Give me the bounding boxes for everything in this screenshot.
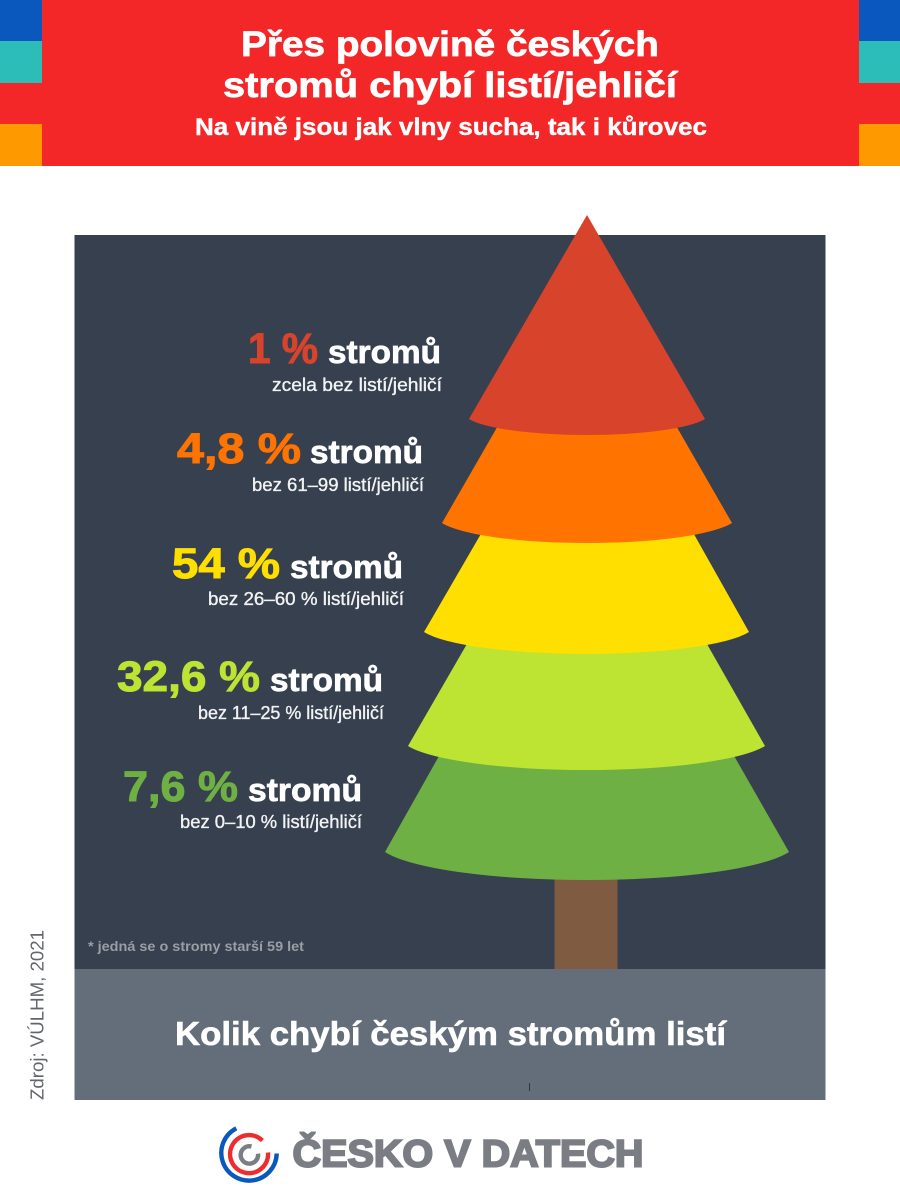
- label: 32,6 %: [117, 653, 384, 723]
- icon: concentric rings: [221, 1128, 277, 1181]
- tree illustration: [385, 215, 789, 969]
- logo: Česko v datech: [221, 1128, 643, 1181]
- label: 4,8 %: [177, 425, 424, 495]
- right colour squares: [859, 0, 900, 166]
- tree tier: 54 %: [424, 520, 749, 654]
- label: 7,6 %: 7,6 %: [123, 763, 238, 811]
- label: 54 %: bez 26–60 % listí/jehličí: [208, 589, 404, 609]
- label: 1 %: zcela bez listí/jehličí: [272, 375, 442, 395]
- tree tier: 7,6 %: [385, 740, 789, 880]
- label: 32,6 %: stromů: [270, 662, 383, 698]
- tree tier: 32,6 %: [408, 630, 765, 770]
- logo wordmark: ČESKO V DATECH: [292, 1130, 644, 1176]
- panel: dark chart background: [74, 235, 826, 969]
- subtitle: Na vině jsou jak vlny sucha, tak i kůrovec: [195, 114, 707, 141]
- left colour squares: [0, 0, 42, 166]
- title: Přes polovině českých: [241, 25, 659, 64]
- label: 7,6 %: bez 0–10 % listí/jehličí: [180, 812, 362, 832]
- label: 7,6 %: [123, 763, 362, 832]
- label: 32,6 %: 32,6 %: [117, 653, 260, 701]
- footnote: * jedná se o stromy starší 59 let: [88, 939, 305, 954]
- tree trunk: [554, 870, 618, 969]
- title: [223, 25, 678, 105]
- label: 1 %: [248, 325, 442, 395]
- label: 32,6 %: bez 11–25 % listí/jehličí: [198, 703, 384, 723]
- title: stromů chybí listí/jehličí: [223, 66, 678, 105]
- header banner: [0, 0, 900, 166]
- caption heading: Kolik chybí českým stromům listí: [175, 1015, 728, 1052]
- source note: Zdroj: VÚLHM, 2021: [26, 930, 48, 1100]
- label: 4,8 %: bez 61–99 listí/jehličí: [252, 475, 424, 495]
- label: 54 %: 54 %: [172, 540, 280, 588]
- label: 54 %: [172, 540, 404, 609]
- tree tier: 4,8 %: [442, 410, 732, 543]
- label: 54 %: stromů: [290, 549, 403, 585]
- label: 7,6 %: stromů: [248, 772, 362, 808]
- label: 1 %: stromů: [328, 334, 441, 370]
- panel: caption bar: [74, 969, 826, 1100]
- label: 4,8 %: 4,8 %: [177, 425, 301, 473]
- tree tier: 1 %: [469, 215, 705, 435]
- label: 4,8 %: stromů: [310, 434, 423, 470]
- label: 1 %: 1 %: [248, 325, 318, 373]
